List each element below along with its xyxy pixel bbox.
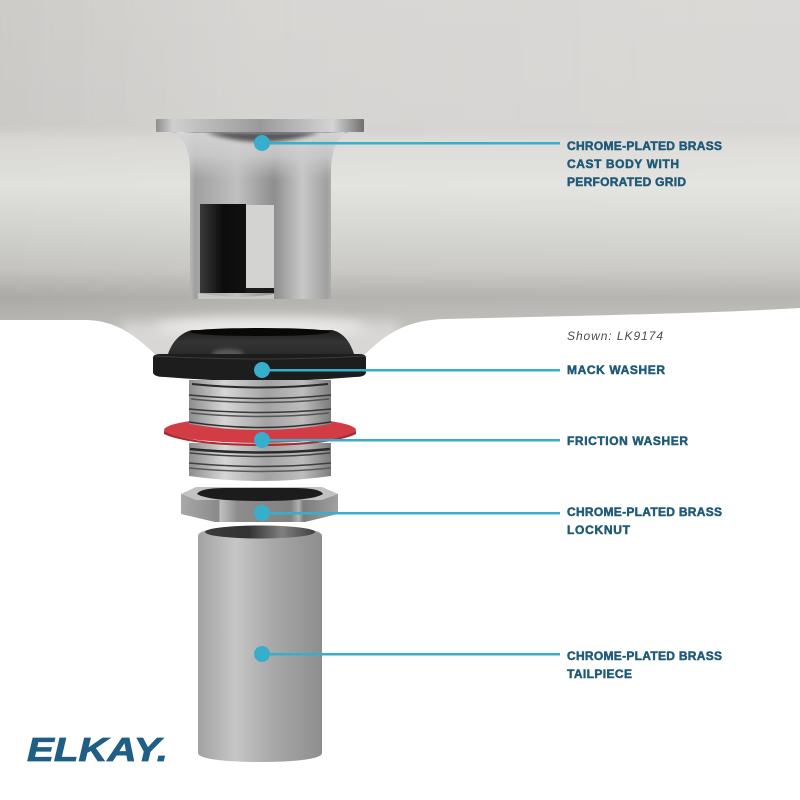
icon: chrome-plated locknut (181, 487, 338, 522)
icon: chrome-plated cast body with perforated grid (156, 119, 364, 299)
callout: mack washer leader (254, 362, 560, 378)
callout: cast body label: PERFORATED GRID (567, 175, 686, 189)
callout: cast body label: CHROME-PLATED BRASS (567, 139, 722, 153)
icon: mack washer (153, 328, 366, 381)
callout: cast body label (567, 139, 722, 189)
callout: locknut label (567, 505, 722, 537)
icon: upper threaded shaft (189, 380, 331, 430)
callout: cast body leader (254, 135, 560, 151)
callout: tailpiece label (567, 649, 722, 681)
callout: friction washer leader (254, 432, 560, 448)
note: model shown: Shown: LK9174 (567, 329, 663, 343)
callout: cast body label: CAST BODY WITH (567, 157, 679, 171)
callout: tailpiece label: TAILPIECE (567, 667, 632, 681)
callout: friction washer label: FRICTION WASHER (567, 434, 688, 448)
icon: lower threaded shaft (189, 443, 331, 481)
callout: tailpiece leader (254, 646, 560, 662)
logo: Elkay: ELKAY. (27, 731, 168, 768)
icon: red friction washer (164, 417, 356, 446)
callout: locknut leader (254, 505, 560, 521)
callout: locknut label: LOCKNUT (567, 523, 631, 537)
panel: stainless steel sink bottom (0, 0, 800, 362)
callout: mack washer label: MACK WASHER (567, 363, 665, 377)
icon: chrome-plated tailpiece (198, 526, 322, 762)
callout: tailpiece label: CHROME-PLATED BRASS (567, 649, 722, 663)
callout: locknut label: CHROME-PLATED BRASS (567, 505, 722, 519)
